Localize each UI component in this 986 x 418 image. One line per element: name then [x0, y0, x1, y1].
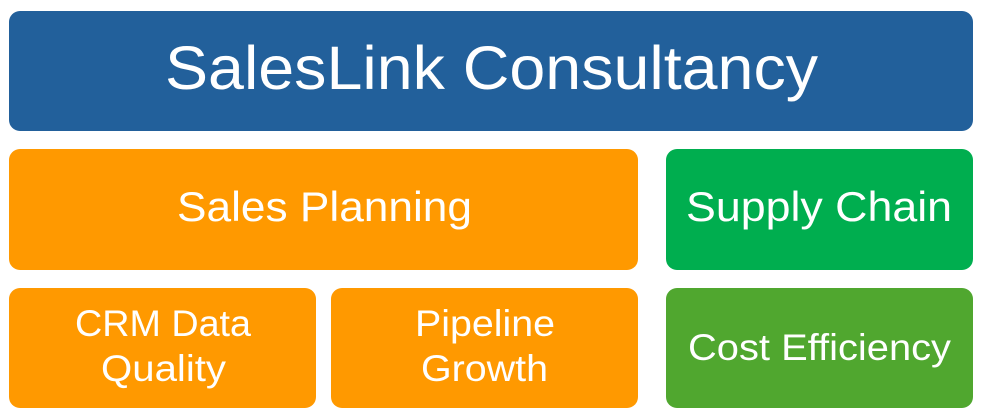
- panel: Sales Planning: [9, 149, 638, 270]
- panel: Cost Efficiency: [666, 288, 973, 408]
- label: Pipeline Growth: Pipeline: [415, 303, 555, 344]
- panel: CRM Data Quality: [9, 288, 316, 408]
- label: CRM Data Quality: [75, 303, 251, 389]
- heading: Sales Planning: Sales Planning: [177, 183, 472, 230]
- heading: Supply Chain: Supply Chain: [686, 183, 952, 230]
- label: CRM Data Quality: Quality: [101, 348, 227, 389]
- title: SalesLink Consultancy: [165, 34, 819, 102]
- label: Cost Efficiency: Cost Efficiency: [688, 327, 952, 368]
- panel: SalesLink Consultancy title: [9, 11, 973, 131]
- label: Pipeline Growth: [415, 303, 555, 389]
- label: Pipeline Growth: Growth: [421, 348, 548, 389]
- label: CRM Data Quality: CRM Data: [75, 303, 251, 344]
- panel: Pipeline Growth: [331, 288, 638, 408]
- panel: Supply Chain: [666, 149, 973, 270]
